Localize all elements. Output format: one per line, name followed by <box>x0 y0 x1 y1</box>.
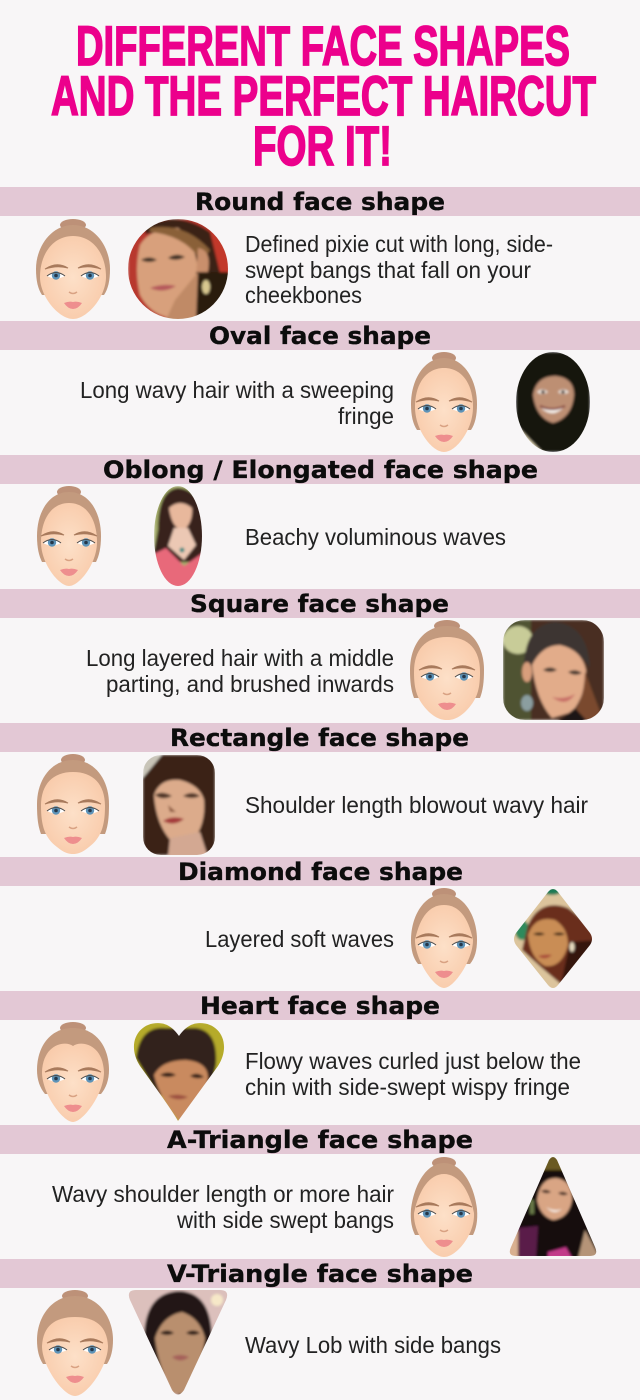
icon: oval face illustration <box>411 352 477 452</box>
panel: square face shape <box>0 589 640 722</box>
description: oval <box>80 377 394 429</box>
heading band: rectangle <box>0 723 640 752</box>
panel: oblong face shape <box>0 455 640 590</box>
heading band: oval <box>0 321 640 350</box>
heading band: round <box>0 187 640 216</box>
photo: a-triangle portrait <box>510 1157 596 1256</box>
heading band: a-triangle: A-Triangle face shape <box>167 1126 473 1154</box>
description: oval: Long wavy hair with a sweeping <box>80 377 394 403</box>
description: rectangle: Shoulder length blowout wavy hair <box>245 792 588 818</box>
description: heart: Flowy waves curled just below the <box>245 1048 581 1074</box>
title: FOR IT! <box>253 114 392 177</box>
icon: square face illustration <box>410 620 484 720</box>
icon: a-triangle face illustration <box>411 1157 477 1257</box>
heading band: diamond: Diamond face shape <box>178 858 463 886</box>
icon: heart face illustration <box>37 1022 109 1122</box>
description: a-triangle <box>52 1181 394 1233</box>
icon: v-triangle face illustration <box>37 1290 113 1396</box>
panel: oval face shape <box>0 321 640 455</box>
heading band: rectangle: Rectangle face shape <box>170 724 469 752</box>
heading band: v-triangle <box>0 1259 640 1288</box>
photo: diamond portrait <box>514 889 592 988</box>
description: square: parting, and brushed inwards <box>106 671 394 697</box>
icon: diamond face illustration <box>411 888 477 988</box>
photo: oblong portrait <box>154 486 202 586</box>
description: round <box>245 231 553 308</box>
photo: square portrait <box>503 620 604 722</box>
description: oblong: Beachy voluminous waves <box>245 524 506 550</box>
description: round: Defined pixie cut with long, side- <box>245 231 553 257</box>
description: v-triangle: Wavy Lob with side bangs <box>245 1332 501 1358</box>
heading band: square: Square face shape <box>190 590 449 618</box>
heading band: diamond <box>0 857 640 886</box>
description: diamond: Layered soft waves <box>205 926 394 952</box>
heading band: round: Round face shape <box>195 188 445 216</box>
panel: heart face shape <box>0 991 640 1122</box>
description: round: cheekbones <box>245 282 362 308</box>
description: heart: chin with side-swept wispy fringe <box>245 1074 570 1100</box>
icon: oblong face illustration <box>37 486 101 586</box>
photo: oval portrait <box>516 352 590 455</box>
description: a-triangle: Wavy shoulder length or more hair <box>52 1181 394 1207</box>
heading band: heart: Heart face shape <box>200 992 440 1020</box>
description: square <box>86 645 394 697</box>
heading band: oval: Oval face shape <box>209 322 431 350</box>
description: oval: fringe <box>338 403 394 429</box>
photo: rectangle portrait <box>143 755 215 857</box>
heading band: v-triangle: V-Triangle face shape <box>167 1260 473 1288</box>
panel: rectangle face shape <box>0 723 640 857</box>
photo: heart portrait <box>130 1022 226 1122</box>
heading band: a-triangle <box>0 1125 640 1154</box>
heading band: oblong <box>0 455 640 484</box>
description: square: Long layered hair with a middle <box>86 645 394 671</box>
title <box>51 14 596 177</box>
description: a-triangle: with side swept bangs <box>176 1207 394 1233</box>
panel: a-triangle face shape <box>0 1125 640 1258</box>
panel: round face shape <box>0 187 640 322</box>
heading band: square <box>0 589 640 618</box>
heading band: heart <box>0 991 640 1020</box>
panel: v-triangle face shape <box>0 1259 640 1400</box>
panel: diamond face shape <box>0 857 640 991</box>
description: round: swept bangs that fall on your <box>245 257 531 283</box>
description: heart <box>245 1048 581 1100</box>
photo: round portrait <box>128 219 232 322</box>
photo: v-triangle portrait <box>128 1290 228 1394</box>
icon: rectangle face illustration <box>37 754 109 854</box>
icon: round face illustration <box>36 219 110 319</box>
heading band: oblong: Oblong / Elongated face shape <box>103 456 538 484</box>
